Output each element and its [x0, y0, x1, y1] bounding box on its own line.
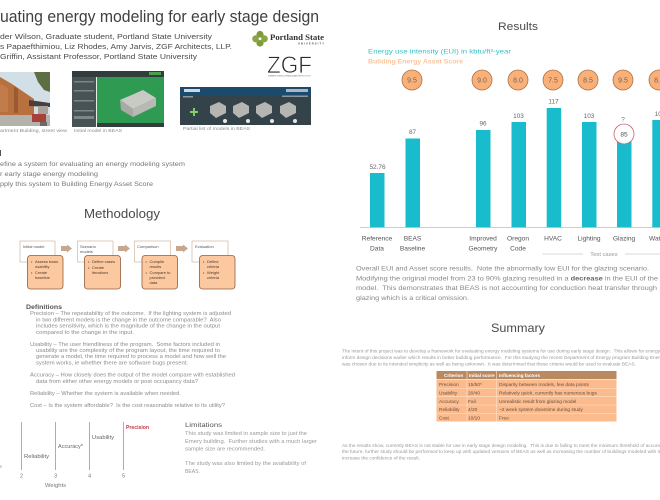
goal text — [0, 149, 186, 188]
bar chart: EUI: 103 — [513, 113, 524, 120]
bar chart: EUI: HVAC — [544, 236, 562, 242]
bar chart: EUI: Code — [510, 246, 526, 252]
heading: methodology: Methodology — [84, 206, 160, 221]
definitions text: compared to the change in the input. — [36, 330, 134, 336]
chart: criteria weights: Precision — [126, 425, 149, 431]
authors: der Wilson, Graduate student, Portland State University — [0, 32, 212, 41]
chart: criteria weights: Accuracy* — [58, 444, 84, 450]
summary conclusion text: increase the confidence of the result. — [342, 456, 420, 460]
limitations: Emery building. Further studies with a much larger — [185, 439, 317, 445]
heading: summary: Summary — [491, 321, 545, 335]
bar chart: EUI: Lighting — [577, 236, 601, 242]
limitations: sample size are recommended. — [185, 446, 265, 452]
chart: criteria weights: Weights — [45, 483, 66, 489]
summary table: 10/10 — [468, 416, 480, 422]
definitions text: Cost – Is the system affordable? Is the cost reasonable relative to its utility? — [30, 403, 225, 409]
asset score circles: 9.5 — [618, 78, 628, 84]
definitions text: system works, ie whether there are software bugs present. — [36, 360, 188, 366]
image captions: artment Building, street view — [0, 128, 68, 133]
step: scenario models — [78, 241, 120, 289]
limitations — [185, 422, 317, 475]
flow diagram — [20, 241, 235, 289]
step: comparison: results — [150, 264, 161, 269]
step: scenario models: • — [88, 259, 90, 264]
bar chart: EUI: 52.76 — [370, 164, 386, 171]
step: scenario models: iterations — [92, 270, 108, 275]
authors: s Papaefthimiou, Liz Rhodes, Amy Jarvis, ZGF Architects, LLP. — [0, 42, 232, 51]
step: scenario models: Define cases — [92, 259, 115, 264]
results caption: Modifying the original model from 23 to 90% glazing resulted in a decrease in the EUI of the — [356, 276, 659, 282]
step: initial model: Assess basic — [35, 259, 58, 264]
summary conclusion text: the future, further study should be performed to keep up with updated versions of BEAS as well as increasing the number of buildings modeled with it — [342, 449, 660, 454]
step: comparison: • — [146, 270, 148, 275]
bar chart: EUI: Glazing — [613, 236, 636, 242]
summary table: Reliability — [439, 407, 460, 413]
logo: ZGF: ZIMMER GUNSUL FRASCA ARCHITECTS LLP — [268, 74, 311, 78]
photo: apartment building — [0, 72, 50, 126]
chart: criteria weights — [0, 422, 149, 489]
asset score circles: 9.0 — [477, 78, 487, 84]
image captions: Initial model in BEAS — [74, 128, 122, 133]
summary table: Initial score — [469, 373, 495, 378]
arrow 3 — [176, 244, 188, 252]
bar chart: EUI: 117 — [548, 98, 559, 106]
asset score circles: 7.5 — [548, 78, 558, 84]
summary table — [436, 371, 616, 422]
summary intro text: The intent of this project was to develop a framework for evaluating energy modeling systems for use during early stage design. This allows for energy — [342, 348, 660, 354]
step: evaluation: Evaluation — [195, 244, 214, 249]
logo: Portland State University: UNIVERSITY — [298, 42, 324, 46]
chart legend: Energy use intensity (EUI) in kbtu/ft²-year — [368, 48, 512, 56]
callout: glazing value — [614, 124, 634, 144]
limitations: The study was also limited by the availability of — [185, 461, 307, 467]
summary table: 4/20 — [468, 407, 478, 413]
step: initial model: Create — [35, 270, 48, 275]
screenshot: initial model in BEAS — [72, 71, 164, 127]
bar chart: EUI: 87 — [409, 129, 416, 136]
step: scenario models: models — [80, 249, 93, 254]
chart: criteria weights: 3 — [54, 474, 57, 480]
asset score circles — [402, 70, 660, 90]
image captions — [0, 126, 250, 133]
authors: Griffin, Assistant Professor, Portland State University — [0, 52, 197, 61]
step: evaluation — [192, 241, 235, 289]
chart legend — [368, 48, 512, 66]
bar chart: EUI: Geometry — [469, 246, 498, 252]
step: evaluation: • — [203, 259, 205, 264]
step: evaluation: Weight — [207, 270, 220, 275]
summary table: Precision — [439, 382, 459, 388]
summary table: Unrealistic result from glazing model — [499, 399, 576, 405]
step: initial model: • — [31, 270, 33, 275]
step: evaluation: criteria — [207, 264, 220, 269]
step: comparison: data — [150, 280, 158, 285]
authors — [0, 32, 232, 61]
step: comparison: provided — [150, 275, 165, 280]
summary table: Accuracy — [439, 399, 459, 405]
bar chart: EUI: Oregon — [507, 236, 529, 242]
summary table: Free — [499, 416, 509, 422]
asset score circles: 8.5 — [583, 78, 593, 84]
step: scenario models: • — [88, 265, 90, 270]
summary table: Relatively quick, currently has numerous bugs — [499, 390, 597, 396]
definitions text: generate a model, the time required to process a model and how well the — [36, 354, 226, 360]
summary table: 20/40 — [468, 390, 480, 396]
definitions text: data from either other energy models or post occupancy data? — [36, 379, 198, 385]
step: evaluation: criteria — [207, 275, 220, 280]
limitations: This study was limited in sample size to just the — [185, 431, 307, 437]
chart legend: Building Energy Asset Score — [368, 58, 463, 66]
bar chart: EUI: Improved — [469, 236, 497, 242]
heading: definitions: Definitions — [26, 304, 62, 311]
summary table: Fail — [468, 399, 476, 405]
test cases bracket — [542, 252, 660, 258]
summary table: Disparity between models, few data points — [499, 382, 589, 388]
step: scenario models: Scenario — [80, 244, 97, 249]
callout: glazing value: 85 — [620, 132, 628, 138]
bar chart: EUI: Baseline — [400, 246, 425, 252]
arrow 2 — [118, 244, 130, 252]
definitions text: includes sensitivity, which is the magnitude of the change in the output — [36, 324, 221, 330]
step: comparison: Compile — [150, 259, 165, 264]
bar chart: EUI: 96 — [479, 120, 487, 128]
summary conclusion text: As the results show, currently BEAS is not stable for use in early stage design modeling. This is due to failing to meet the minimum threshold of accura — [342, 443, 660, 448]
definitions text: Precision – The repeatability of the outcome. If the lighting system is adjusted — [30, 311, 231, 317]
summary table: 15/50* — [468, 382, 482, 388]
bar chart: EUI: ? — [621, 116, 625, 124]
summary table: Criterion — [444, 373, 463, 378]
step: comparison: Compare to — [150, 270, 171, 275]
bar chart: EUI: Reference — [362, 236, 393, 242]
results caption: model. This demonstrates that BEAS is not accounting for conduction heat transfer through — [356, 285, 658, 292]
step: comparison: • — [146, 259, 148, 264]
summary table: Cost — [439, 416, 450, 422]
bar chart: EUI: 103 — [584, 113, 595, 120]
step: initial model: • — [31, 259, 33, 264]
goal text: r early stage energy modeling — [0, 171, 98, 178]
chart: criteria weights: Usability — [92, 435, 114, 441]
definitions text: Accuracy – How closely does the output of the model compare with established — [30, 372, 235, 378]
summary intro text: inform design decisions earlier which results in better building performance. For this studying the recent Department of Energy program Building Ener — [342, 355, 660, 360]
summary intro text: was chosen due to its intended simplicity as well as being unknown. It was determined that these criteria would be used to evaluate BEAS. — [342, 362, 636, 366]
summary intro text — [342, 348, 660, 366]
step: initial model: usability — [35, 264, 49, 269]
results caption: glazing which is a critical omission. — [356, 295, 469, 302]
goal text: pply this system to Building Energy Asset Score — [0, 181, 153, 188]
chart: criteria weights: 2 — [20, 474, 23, 480]
summary table: ~2 week system downtime during study — [499, 407, 583, 413]
summary table: Usability — [439, 390, 458, 396]
step: evaluation: • — [203, 270, 205, 275]
heading: results: Results — [498, 21, 539, 33]
step: initial model — [20, 241, 63, 289]
definitions text: in two different models is the change in the outcome comparable? Also — [36, 318, 221, 324]
arrow 1 — [61, 244, 72, 252]
logo: Portland State University — [252, 31, 324, 47]
step: initial model: baseline — [35, 275, 51, 280]
bar chart: EUI — [360, 98, 660, 258]
step: comparison — [134, 241, 178, 289]
bar chart: EUI: Data — [370, 246, 384, 252]
goal text: efine a system for evaluating an energy modeling system — [0, 161, 186, 168]
step: initial model: Initial model — [23, 244, 44, 249]
limitations: BEAS. — [185, 469, 200, 475]
definitions text: usability are the complexity of the program layout, the time required to — [36, 348, 220, 354]
bar chart: EUI: BEAS — [404, 236, 422, 242]
step: evaluation: Define — [207, 259, 219, 264]
definitions text — [30, 311, 235, 409]
screenshot: partial list of models — [180, 87, 311, 125]
asset score circles: 8.0 — [513, 78, 523, 84]
logo: Portland State University: Portland State — [270, 33, 324, 42]
logo: ZGF: ZGF — [267, 52, 312, 79]
title: uating energy modeling for early stage design — [0, 8, 319, 26]
results caption — [356, 266, 659, 302]
asset score circles: 9.5 — [407, 78, 417, 84]
chart: criteria weights: 5 — [122, 474, 125, 480]
definitions text: Usability – The user friendliness of the program. Some factors included in — [30, 342, 220, 348]
step: scenario models: Create — [92, 265, 105, 270]
chart: criteria weights: 4 — [88, 474, 91, 480]
definitions text: Reliability – Whether the system is available when needed. — [30, 391, 181, 397]
limitations: Limitations — [185, 422, 223, 429]
test cases bracket: Test cases — [590, 252, 618, 258]
chart: criteria weights: Reliability — [24, 454, 49, 460]
summary conclusion text — [342, 443, 660, 460]
image captions: Partial list of models in BEAS — [183, 126, 250, 131]
summary table: Influencing factors — [499, 373, 541, 378]
step: comparison: Comparison — [137, 244, 159, 249]
results caption: Overall EUI and Asset score results. Note the abnormally low EUI for the glazing scenario. — [356, 266, 649, 272]
